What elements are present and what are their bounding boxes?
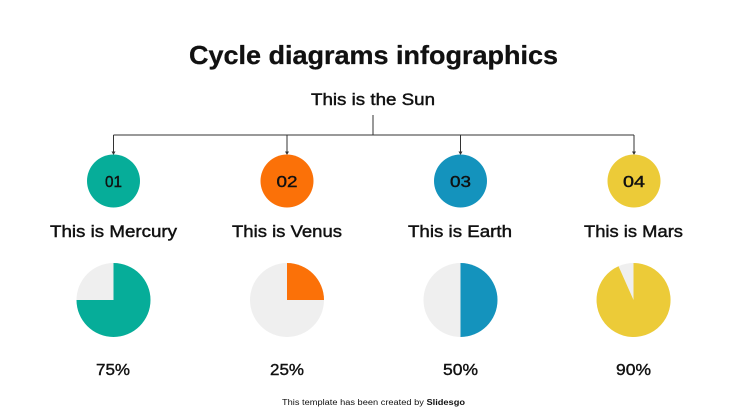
number badge 01: 01 — [105, 174, 122, 191]
pie chart 25% — [250, 263, 324, 337]
value 50%: 50% — [443, 362, 478, 379]
tree connector — [112, 115, 636, 155]
column: Mercury — [50, 154, 178, 379]
label: Mercury: This is Mercury — [50, 222, 178, 241]
number badge 04: 04 — [623, 174, 645, 191]
number badge 02 — [260, 154, 314, 208]
value 25%: 25% — [270, 362, 304, 379]
label: Earth: This is Earth — [408, 222, 512, 241]
column: Venus — [232, 154, 342, 379]
label: Venus: This is Venus — [232, 222, 342, 241]
number badge 01 — [87, 154, 140, 208]
value 75%: 75% — [96, 362, 130, 379]
footer credit: This template has been created by Slidesgo — [282, 398, 465, 407]
number badge 04 — [608, 154, 660, 208]
number badge 03: 03 — [450, 174, 471, 191]
number badge 02: 02 — [276, 174, 298, 191]
column: Mars — [584, 154, 683, 379]
pie chart 90% — [596, 263, 671, 337]
heading: the Sun: This is the Sun — [311, 90, 435, 109]
title: Cycle diagrams infographics — [189, 40, 558, 70]
label: Mars: This is Mars — [584, 222, 683, 241]
value 90%: 90% — [616, 362, 651, 379]
pie chart 50% — [424, 263, 498, 337]
number badge 03 — [434, 154, 487, 208]
column: Earth — [408, 154, 512, 379]
pie chart 75% — [76, 263, 151, 337]
